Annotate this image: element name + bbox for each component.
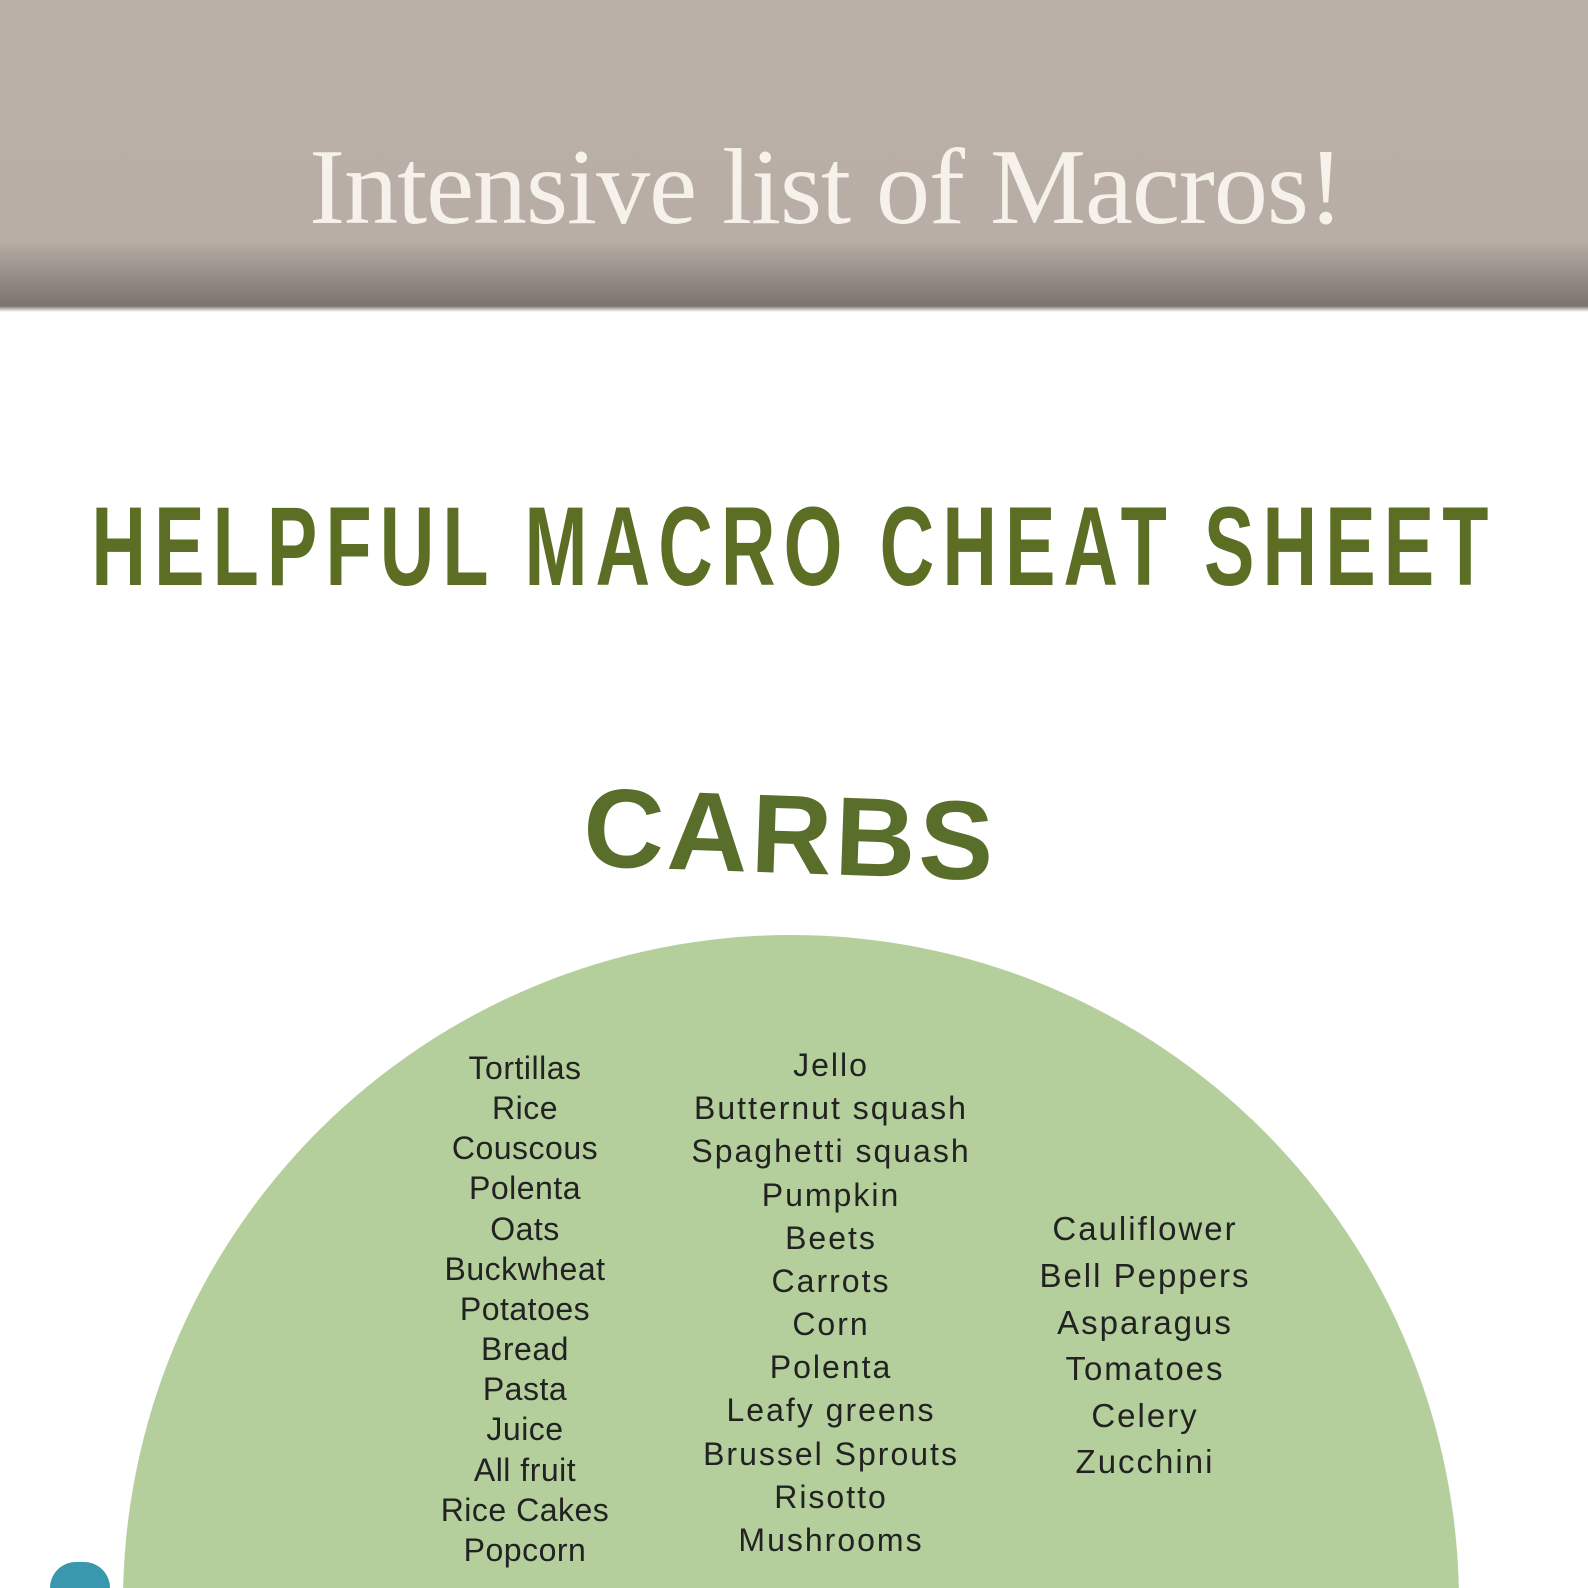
list column 1: Juice: [486, 1411, 564, 1447]
list column 3: Asparagus: [1057, 1304, 1233, 1341]
icon: teal decorative fragment: [50, 1562, 110, 1588]
list column 2: Spaghetti squash: [691, 1133, 971, 1169]
banner title: Intensive list of Macros!: [309, 128, 1343, 247]
list column 1: Pasta: [483, 1371, 567, 1407]
list column 3: Tomatoes: [1065, 1350, 1225, 1387]
carbs semicircle: [123, 935, 1459, 1588]
list column 2: Leafy greens: [726, 1392, 936, 1428]
list column 1: Oats: [490, 1211, 560, 1247]
list column 3: Cauliflower: [1052, 1210, 1238, 1247]
list column 2: Carrots: [772, 1263, 890, 1299]
list column 3: Celery: [1091, 1397, 1199, 1434]
list column 1: [441, 1050, 609, 1568]
list column 3: [1039, 1210, 1251, 1480]
list column 2: Beets: [785, 1220, 877, 1256]
list column 1: Rice Cakes: [441, 1492, 609, 1528]
list column 3: Zucchini: [1076, 1443, 1214, 1480]
list column 2: Jello: [793, 1047, 869, 1083]
list column 2: Brussel Sprouts: [703, 1436, 959, 1472]
list column 2: [691, 1047, 971, 1558]
list column 2: Butternut squash: [694, 1090, 968, 1126]
list column 2: Corn: [792, 1306, 870, 1342]
main heading: HELPFUL MACRO CHEAT SHEET: [91, 484, 1497, 609]
list column 1: Buckwheat: [444, 1251, 606, 1287]
heading: CARBS: CARBS: [581, 765, 999, 904]
list column 3: Bell Peppers: [1039, 1257, 1251, 1294]
list column 1: Popcorn: [464, 1532, 586, 1568]
list column 1: Bread: [481, 1331, 569, 1367]
list column 2: Polenta: [770, 1349, 892, 1385]
list column 1: Rice: [492, 1090, 558, 1126]
list column 2: Pumpkin: [762, 1177, 900, 1213]
list column 1: Couscous: [452, 1130, 598, 1166]
list column 2: Risotto: [774, 1479, 888, 1515]
list column 1: Polenta: [469, 1170, 581, 1206]
list column 2: Mushrooms: [738, 1522, 924, 1558]
header banner: [0, 0, 1588, 312]
list column 1: Tortillas: [469, 1050, 581, 1086]
list column 1: Potatoes: [460, 1291, 590, 1327]
list column 1: All fruit: [474, 1452, 576, 1488]
